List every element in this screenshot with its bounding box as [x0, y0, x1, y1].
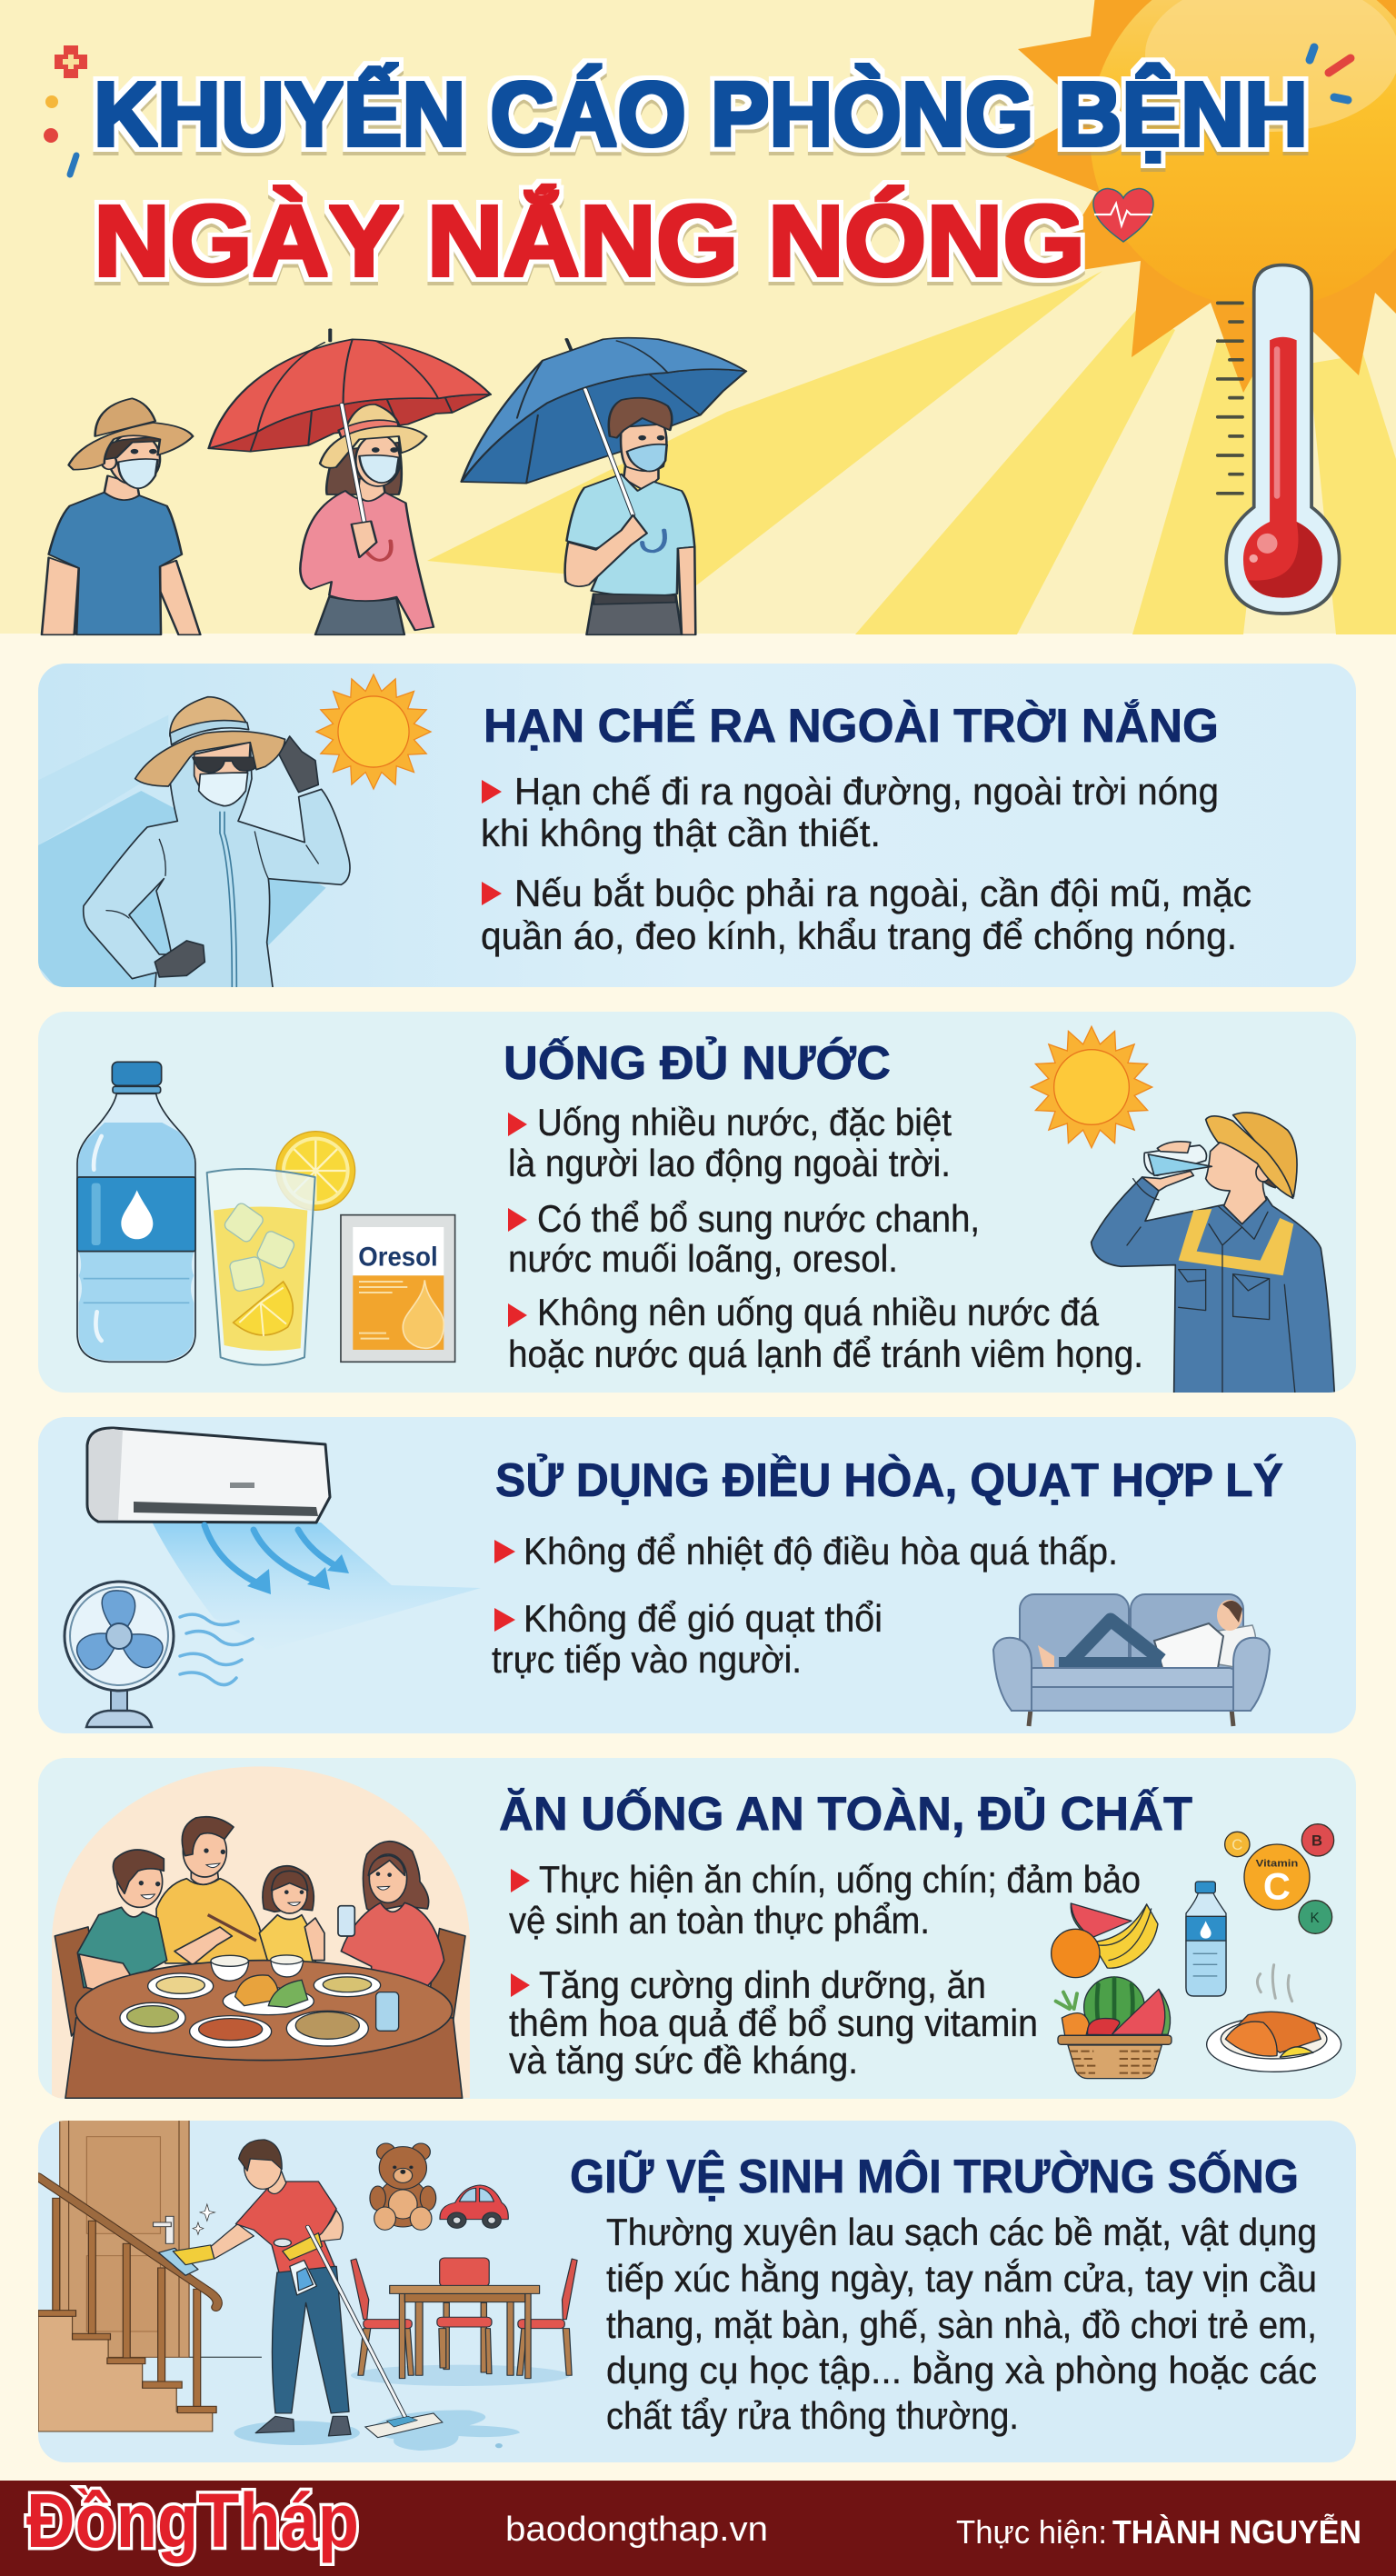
water bottle [77, 1062, 195, 1362]
credit: Thực hiện: [956, 2513, 1107, 2551]
illustration: worker drinking water [1092, 1113, 1334, 1393]
icon: sun [316, 674, 431, 789]
bullet list: hoặc nước quá lạnh để tránh viêm họng. [508, 1333, 1143, 1375]
bullet list [481, 770, 1251, 957]
panel: stay out of the sun [38, 664, 1356, 989]
vitamin badges: C [1263, 1864, 1291, 1907]
woman under red umbrella [300, 404, 434, 634]
vitamin badges: K [1311, 1911, 1321, 1926]
oresol sachet [341, 1215, 455, 1362]
bullet list: và tăng sức đề kháng. [509, 2039, 858, 2082]
bullet list: khi không thật cần thiết. [481, 812, 881, 854]
cleaning person [158, 2140, 351, 2436]
icon: thermometer [1218, 265, 1340, 614]
header banner [0, 0, 1396, 634]
man under blue umbrella [565, 389, 695, 634]
vitamin badges [1225, 1824, 1334, 1933]
vitamin badges: Vitamin [1256, 1858, 1299, 1869]
toy car [440, 2185, 508, 2228]
paragraph: tiếp xúc hằng ngày, tay nắm cửa, tay vịn cầu [606, 2257, 1317, 2300]
red umbrella [209, 330, 491, 452]
bullet list [509, 1858, 1141, 2082]
panel: safe and nutritious eating [38, 1758, 1356, 2099]
heading: SỬ DỤNG ĐIỀU HÒA, QUẠT HỢP LÝ [495, 1453, 1283, 1507]
panel: air conditioner and fan [38, 1417, 1356, 1733]
decorative marks: right [1310, 47, 1351, 100]
title line 1: KHUYẾN CÁO PHÒNG BỆNH [94, 64, 1308, 165]
teddy bear [370, 2143, 436, 2230]
credit: THÀNH NGUYỄN [1112, 2512, 1361, 2551]
fruit basket [1056, 1977, 1172, 2079]
glass of lemonade [207, 1169, 315, 1365]
paragraph: chất tẩy rửa thông thường. [606, 2394, 1019, 2437]
heading: HẠN CHẾ RA NGOÀI TRỜI NẮNG [484, 699, 1219, 753]
decorative marks: left [44, 45, 87, 175]
sparkles [193, 2204, 215, 2234]
small water bottle [1186, 1882, 1226, 1996]
panel: keep the living environment clean [38, 2118, 1356, 2462]
bullet list: là người lao động ngoài trời. [508, 1142, 951, 1184]
mop [308, 2227, 443, 2438]
heading: GIỮ VỆ SINH MÔI TRƯỜNG SỐNG [570, 2150, 1299, 2203]
bullet list: nước muối loãng, oresol. [508, 1237, 898, 1280]
bullet list: Nếu bắt buộc phải ra ngoài, cần đội mũ, mặc [514, 872, 1251, 914]
illustration: covered woman with hat [38, 674, 431, 989]
logo: ĐồngTháp [26, 2478, 359, 2563]
panel: drink enough water [38, 1012, 1356, 1393]
illustration: family at dining table [52, 1766, 470, 2098]
blue umbrella [462, 338, 746, 484]
bullet list [492, 1530, 1118, 1681]
icon: fan wind [180, 1614, 253, 1685]
illustration: healthy food and vitamins [1052, 1824, 1341, 2079]
illustration: three people under the sun [42, 330, 746, 634]
paragraph [606, 2211, 1317, 2437]
icon: heart with pulse [1093, 189, 1153, 242]
title line 2: NGÀY NẮNG NÓNG [94, 185, 1085, 297]
icon: sun [1031, 1026, 1152, 1148]
icon: electric fan [65, 1582, 174, 1727]
bullet list: Không để nhiệt độ điều hòa quá thấp. [524, 1530, 1118, 1573]
vitamin badges: B [1311, 1832, 1322, 1850]
bullet list: Uống nhiều nước, đặc biệt [537, 1101, 952, 1143]
bullet list: Không nên uống quá nhiều nước đá [537, 1291, 1100, 1333]
paragraph: dụng cụ học tập... bằng xà phòng hoặc các [606, 2349, 1317, 2391]
big sun [1005, 0, 1396, 393]
illustration: cold air flow [152, 1522, 481, 1650]
lemon slice [276, 1132, 355, 1210]
dining table and chairs [351, 2258, 577, 2379]
illustration: person resting on sofa [993, 1594, 1270, 1726]
icon: air arrows [204, 1525, 349, 1594]
heading: UỐNG ĐỦ NƯỚC [504, 1036, 891, 1090]
bullet list: Thực hiện ăn chín, uống chín; đảm bảo [539, 1858, 1141, 1901]
bullet list: Không để gió quạt thổi [524, 1597, 882, 1640]
family faces [139, 1848, 392, 1905]
bullet list: Có thể bổ sung nước chanh, [537, 1197, 980, 1240]
footer [0, 2478, 1396, 2576]
bullet list: quần áo, đeo kính, khẩu trang để chống nóng. [481, 914, 1237, 957]
sun rays [427, 271, 1396, 634]
bullet list: trực tiếp vào người. [492, 1638, 802, 1681]
table dishes [120, 1955, 399, 2047]
salmon plate [1207, 2012, 1341, 2072]
bullet list [508, 1101, 1143, 1375]
bullet list: Hạn chế đi ra ngoài đường, ngoài trời nóng [514, 770, 1219, 813]
bullet list: thêm hoa quả để bổ sung vitamin [509, 2002, 1038, 2044]
bullet list: Tăng cường dinh dưỡng, ăn [539, 1963, 986, 2006]
credit [956, 2512, 1361, 2551]
website: baodongthap.vn [505, 2511, 768, 2549]
oresol sachet: Oresol [358, 1243, 438, 1273]
paragraph: thang, mặt bàn, ghế, sàn nhà, đồ chơi trẻ em, [606, 2303, 1317, 2346]
illustration: person cleaning house [38, 2118, 577, 2451]
person with straw hat [42, 398, 200, 634]
heading: ĂN UỐNG AN TOÀN, ĐỦ CHẤT [499, 1787, 1192, 1841]
icon: air conditioner [87, 1428, 330, 1523]
vitamin badges: C [1231, 1836, 1242, 1853]
illustration: water bottle, lemonade, oresol [77, 1062, 455, 1365]
watermelon, banana, orange [1052, 1903, 1158, 1978]
paragraph: Thường xuyên lau sạch các bề mặt, vật dụng [606, 2211, 1317, 2253]
bullet list: vệ sinh an toàn thực phẩm. [509, 1899, 930, 1942]
